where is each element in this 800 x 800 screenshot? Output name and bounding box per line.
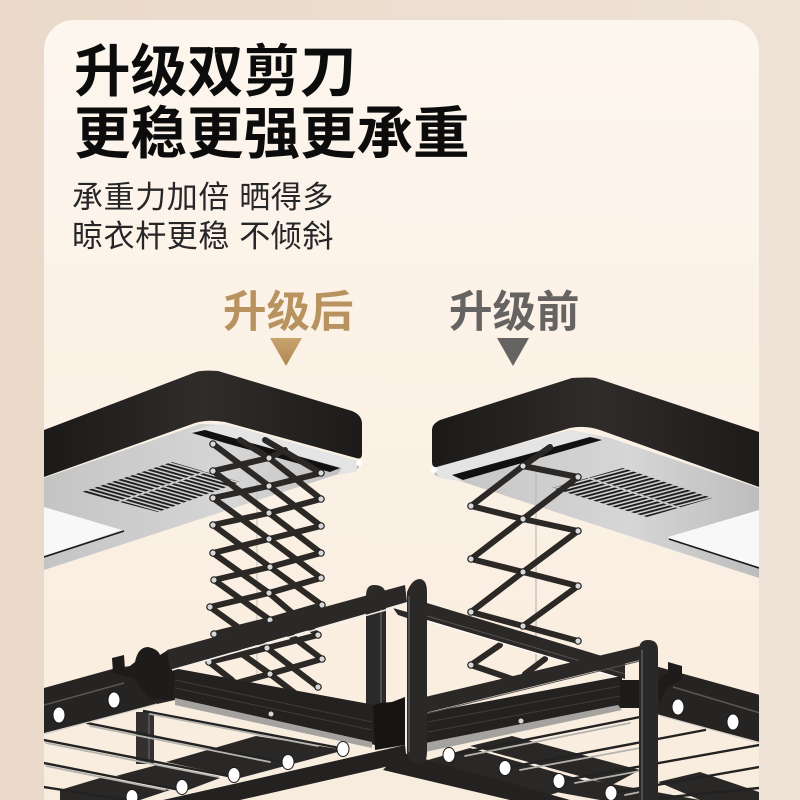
right dark rack panels xyxy=(428,736,759,800)
subtitle line 2: 晾衣杆更稳 不倾斜 xyxy=(72,219,334,254)
right clamp block xyxy=(620,662,682,708)
back post left xyxy=(366,585,386,706)
left double scissor arm xyxy=(209,440,322,697)
big front crossbar left xyxy=(167,585,407,670)
big front crossbar right xyxy=(425,646,640,714)
left side rail xyxy=(44,660,175,734)
left drying rods xyxy=(44,711,340,800)
single scissor pivots xyxy=(468,463,581,668)
right unit white light xyxy=(668,510,759,567)
center post xyxy=(407,579,427,765)
back bar stub behind center post xyxy=(393,608,407,618)
left unit white light xyxy=(44,507,122,556)
left scissor pivots xyxy=(206,441,325,690)
left dark rack panels xyxy=(60,736,345,800)
right back bar xyxy=(427,603,625,679)
arrow: after upgrade xyxy=(270,338,302,366)
right drying rods xyxy=(449,717,759,798)
arrow: before upgrade xyxy=(497,338,529,366)
left unit black casing xyxy=(44,371,362,477)
front rail xyxy=(163,745,570,800)
single scissor arm xyxy=(471,447,578,641)
right front post xyxy=(639,640,658,800)
title line 2: 更稳更强更承重 xyxy=(74,102,470,165)
right unit black casing xyxy=(432,378,759,487)
title line 1: 升级双剪刀 xyxy=(74,40,356,103)
right arm lower links xyxy=(471,645,545,680)
left unit rim and slot xyxy=(186,424,358,475)
right side rail xyxy=(655,666,760,743)
rod end pins xyxy=(126,742,617,800)
right unit vent xyxy=(552,468,712,517)
left unit vent xyxy=(82,462,240,512)
left rail pins xyxy=(53,692,120,723)
center clamp block xyxy=(373,697,405,750)
left flat beam xyxy=(173,668,375,748)
right unit rim and slot xyxy=(433,430,605,482)
right ceiling unit xyxy=(431,378,759,578)
subtitle text block xyxy=(72,180,334,254)
left clamp block xyxy=(112,647,175,700)
right rail pins xyxy=(672,699,739,730)
product illustration xyxy=(44,338,759,800)
right wire xyxy=(535,470,537,670)
left ceiling unit xyxy=(44,371,362,570)
heading: after upgrade: 升级后 xyxy=(223,289,354,337)
left unit silver panel xyxy=(44,424,360,570)
subtitle line 1: 承重力加倍 晒得多 xyxy=(72,180,334,215)
right flat beam xyxy=(425,676,622,752)
back lower post left xyxy=(136,712,154,764)
left wire xyxy=(256,470,258,680)
right unit silver panel xyxy=(434,430,759,578)
heading: before upgrade: 升级前 xyxy=(449,289,580,337)
title xyxy=(74,40,470,165)
